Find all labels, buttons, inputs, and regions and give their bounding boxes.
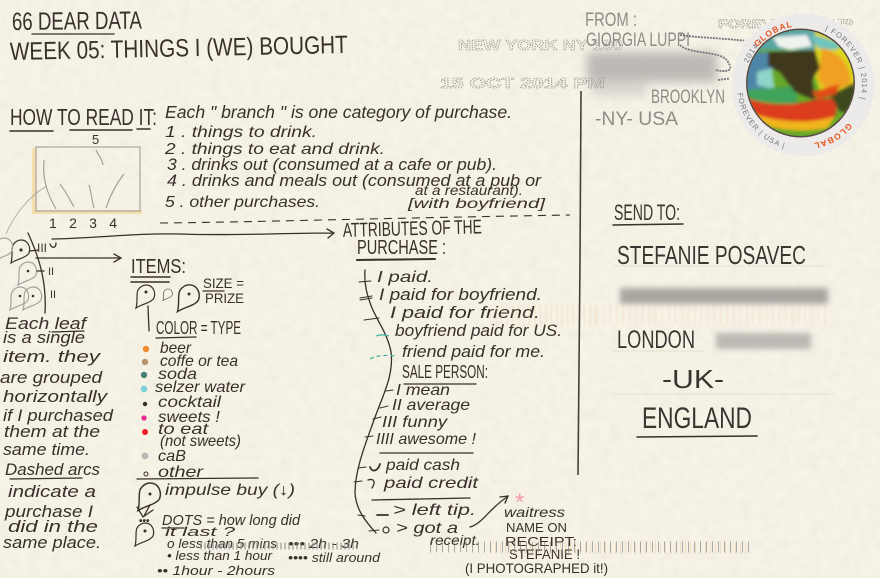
heading: send to: SEND TO: — [614, 200, 680, 225]
text block: branch categories: 1 . things to drink. — [165, 124, 317, 141]
country: -UK- — [662, 364, 724, 394]
text block: sale person: SALE PERSON: — [402, 362, 488, 382]
text block: each leaf explanation: same place. — [3, 534, 101, 552]
arrow: to attributes of the purchase — [52, 229, 334, 239]
heading: color = type — [156, 318, 241, 338]
icon: global forever stamp: GLOBAL — [754, 22, 792, 46]
text block: branch categories: [with boyfriend] — [407, 195, 547, 211]
heading: attributes of the purchase: PURCHASE : — [357, 237, 446, 259]
text block: branch categories: 4 . drinks and meals out (consumed at a pub or — [167, 171, 542, 190]
diagram: branch key box — [6, 132, 142, 234]
blurred postcode — [716, 333, 811, 349]
legend: colour types: soda — [158, 366, 197, 383]
icon: global forever stamp: FOREVER | USA | — [738, 93, 785, 150]
title: 66 DEAR DATA — [12, 7, 142, 36]
text block: payment type — [368, 457, 479, 500]
text block: who paid: I paid. — [377, 269, 433, 286]
text block: branch categories: at a restaurant). — [415, 182, 523, 198]
country: england: ENGLAND — [642, 402, 752, 435]
panel: send to address — [612, 200, 835, 437]
text block: who paid — [377, 269, 562, 361]
text block: branch categories — [164, 102, 547, 211]
icon: global forever stamp: 2014 | — [744, 38, 763, 63]
legend: dots how long it lasted: it last ? — [165, 525, 235, 539]
heading: send to — [613, 200, 683, 225]
text block: payment type: paid credit — [383, 475, 479, 492]
legend: colour types: sweets ! — [158, 409, 221, 426]
legend: dots how long it lasted: o less than 5 mins — [167, 537, 277, 551]
legend: colour types: to eat — [158, 421, 209, 438]
return address — [585, 10, 725, 130]
icon: leaf size scale: PRIZE — [205, 290, 244, 306]
diagram: leaf on a stem — [0, 233, 121, 313]
callout: waitress name: NAME ON — [506, 520, 567, 535]
text block: sale person: IIII awesome ! — [376, 431, 477, 448]
heading: how to read it: HOW TO READ IT: — [10, 104, 157, 130]
diagram: branch key box: 5 — [92, 132, 99, 147]
return address: BROOKLYN — [651, 87, 725, 108]
text block: each leaf explanation: same time. — [3, 441, 90, 459]
return address: -NY- USA — [595, 109, 678, 130]
legend: colour types: (not sweets) — [160, 433, 241, 450]
heading: attributes of the purchase: ATTRIBUTES OF THE — [343, 216, 482, 242]
diagram: leaf on a stem: II — [48, 266, 54, 278]
return address blur — [587, 52, 717, 96]
legend: colour types: other — [158, 464, 204, 481]
text block: who paid: I paid for friend. — [390, 303, 540, 322]
diagram: branch key box: 1 2 3 4 — [49, 215, 117, 231]
legend: colour types: cocktail — [158, 394, 222, 411]
legend: dots how long it lasted: • less than 1 hour — [167, 549, 273, 563]
return address: FROM : — [585, 10, 637, 31]
text block: branch categories: Each " branch " is one category of purchase. — [165, 102, 512, 122]
icon: impulse buy leaf — [137, 482, 295, 517]
callout: waitress name: STEFANIE ! — [509, 547, 580, 562]
text block: payment type: paid cash — [385, 457, 460, 474]
text block: tip and receipt — [377, 502, 480, 548]
text block: each leaf explanation: Each leaf — [5, 315, 89, 333]
blurred street address — [620, 288, 828, 304]
text block: sale person: II average — [392, 397, 470, 414]
text block: branch categories: 5 . other purchases. — [165, 194, 320, 211]
legend: colour types — [137, 340, 258, 481]
text block: sale person — [376, 362, 488, 453]
recipient name: STEFANIE POSAVEC — [617, 240, 806, 270]
chart: annotated stem — [354, 270, 396, 533]
icon: global forever stamp: GLOBAL — [814, 124, 852, 148]
text block: sale person: III funny — [382, 414, 448, 431]
legend: colour types: selzer water — [155, 379, 246, 396]
legend: dots how long it lasted: DOTS = how long did — [162, 512, 301, 529]
legend: colour types: beer — [160, 340, 192, 357]
text block: who paid: friend paid for me. — [402, 342, 545, 361]
text block: each leaf explanation — [0, 315, 114, 552]
text block: who paid: boyfriend paid for US. — [395, 321, 562, 340]
title — [10, 7, 348, 66]
text block: each leaf explanation: are grouped — [0, 369, 103, 387]
postmark: NEW YORK NY 100 — [458, 37, 623, 54]
divider: dashed line — [160, 215, 570, 223]
postmark: 15 OCT 2014 PM — [440, 75, 605, 92]
text block: each leaf explanation: indicate a — [8, 483, 96, 501]
legend: colour types: coffe or tea — [160, 353, 238, 370]
panel: items legend — [131, 256, 381, 578]
icon: leaf size scale — [136, 275, 244, 331]
address guide lines — [612, 266, 835, 394]
panel: how to read it — [6, 102, 547, 234]
heading: color = type: COLOR = TYPE — [156, 318, 241, 338]
legend: dots how long it lasted: ••• — [139, 516, 150, 527]
text block: each leaf explanation: item. they — [3, 348, 102, 366]
postmark — [440, 17, 853, 92]
diagram: leaf on a stem: II — [50, 289, 56, 301]
text block: tip and receipt: receipt. — [430, 532, 480, 548]
postmark: FOREVER STAMP — [718, 17, 853, 31]
text block: sale person: I mean — [396, 382, 450, 399]
title: WEEK 05: THINGS I (WE) BOUGHT — [10, 31, 348, 66]
return address: GIORGIA LUPPI — [586, 30, 690, 51]
icon: leaf size scale: SIZE = — [203, 275, 244, 291]
legend: dots how long it lasted: •••• still around — [288, 551, 381, 565]
callout: waitress name: RECEIPT: — [505, 534, 577, 549]
text block: each leaf explanation: purchase I — [4, 503, 93, 521]
text block: each leaf explanation: did in the — [8, 518, 98, 536]
arrow: receipt to waitress name — [470, 496, 508, 527]
callout: waitress name: (I PHOTOGRAPHED it!) — [465, 560, 608, 576]
text block: tip and receipt: > left tip. — [393, 502, 476, 519]
city: LONDON — [617, 326, 695, 354]
callout: waitress name — [465, 504, 608, 576]
icon: pink asterisk: * — [515, 489, 524, 516]
text block: each leaf explanation: is a single — [3, 329, 85, 347]
legend: dots how long it lasted — [135, 512, 381, 578]
heading: items: ITEMS: — [131, 256, 186, 278]
legend: dots how long it lasted: ••• 2h - 3h — [288, 537, 359, 551]
icon: global forever stamp: | FOREVER | 2014 | — [824, 25, 868, 100]
bleed-through marks — [200, 315, 830, 548]
icon: global forever stamp — [730, 13, 875, 156]
text block: each leaf explanation: horizontally — [3, 388, 109, 406]
legend: dots how long it lasted: •• 1hour - 2hours — [157, 564, 275, 578]
text block: branch categories: 2 . things to eat and drink. — [164, 141, 385, 158]
text block: tip and receipt: > got a — [396, 520, 458, 537]
text block: who paid: I paid for boyfriend. — [379, 285, 542, 304]
text block: each leaf explanation: if I purchased — [3, 407, 114, 425]
callout: waitress name: waitress — [504, 504, 565, 520]
divider: vertical postcard line — [578, 91, 581, 475]
panel: attributes of the purchase — [343, 216, 608, 576]
text block: each leaf explanation: them at the — [4, 423, 100, 441]
text block: each leaf explanation: Dashed arcs — [5, 461, 100, 479]
heading: attributes of the purchase — [343, 216, 482, 260]
text block: branch categories: 3 . drinks out (consumed at a cafe or pub). — [167, 155, 497, 174]
legend: colour types: caB — [158, 448, 186, 465]
diagram: leaf on a stem: III — [37, 241, 47, 255]
icon: impulse buy leaf: impulse buy (↓) — [165, 482, 295, 499]
